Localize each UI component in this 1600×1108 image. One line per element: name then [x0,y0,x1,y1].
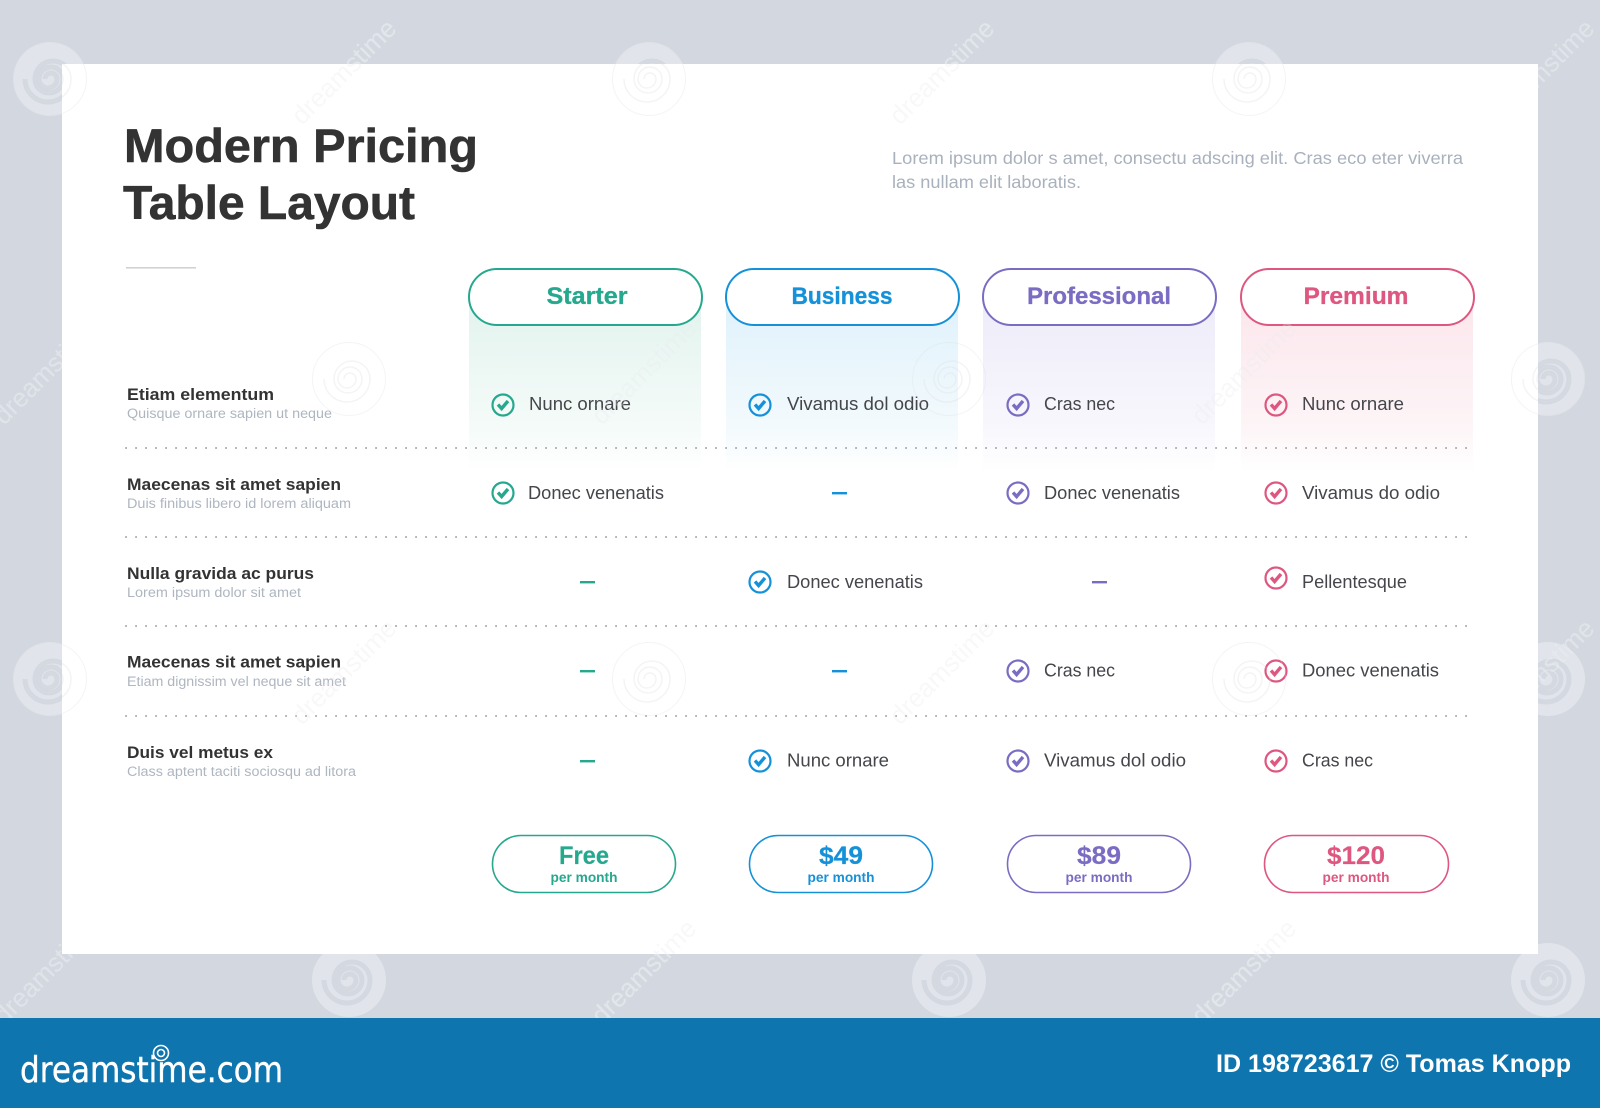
row 4 label: Maecenas sit amet sapien [127,652,341,672]
row 1 starter text: Nunc ornare [529,394,631,414]
white panel [62,64,1538,954]
price pill: $120: per month [1322,869,1390,885]
row 1 starter check [492,394,514,416]
title: Table Layout [123,176,415,229]
row 4 professional text: Cras nec [1044,660,1115,680]
description text [892,148,1463,192]
panel watermark text: dreamstime [285,613,402,730]
title: Modern Pricing [124,119,478,172]
header pill: Starter [469,269,702,325]
row 5 professional check [1008,750,1028,772]
row 1 business check [750,394,770,416]
row 4 [127,652,1439,689]
background watermark text: dreamstime [285,13,402,130]
row 5 label: Duis vel metus ex [127,743,274,762]
row 4 premium text: Donec venenatis [1302,660,1439,680]
panel watermark text: dreamstime [585,313,702,430]
row 2 business dash [832,492,847,494]
background watermark text: dreamstime [883,13,1000,130]
row 2 [127,475,1440,511]
row 3 business text: Donec venenatis [787,572,923,592]
column tint: premium [1241,296,1473,472]
price pill: $49: $49 [819,842,863,870]
panel watermark text: dreamstime [285,13,402,130]
price pill: $120 [1264,836,1448,892]
panel watermark text: dreamstime [1185,913,1302,1030]
background watermark text: dreamstime [1483,613,1600,730]
row 4 starter dash [580,670,595,672]
row 2 starter check [492,482,514,504]
header pill: Premium [1241,269,1474,325]
row 2 starter text: Donec venenatis [528,483,664,503]
header pill: Professional [983,269,1216,325]
row 3 starter dash [580,581,595,583]
row 3 premium check [1266,568,1286,588]
row 5 [127,743,1373,779]
footer credit: ID 198723617 © Tomas Knopp [1216,1050,1571,1078]
row 2 professional text: Donec venenatis [1044,483,1180,503]
price pill: $120: $120 [1327,842,1385,870]
panel watermark spirals [14,42,1584,716]
row 4 business dash [832,670,847,672]
header pill: Professional: Professional [1027,283,1171,310]
row 3 professional dash [1092,581,1107,583]
row 3 sublabel: Lorem ipsum dolor sit amet [127,585,301,600]
description text: Lorem ipsum dolor s amet, consectu adscing elit. Cras eco eter viverra [892,148,1463,168]
row dividers [126,448,1473,716]
row 5 premium text: Cras nec [1302,750,1373,770]
row 1 professional check [1008,394,1028,416]
row 3 premium text: Pellentesque [1302,572,1407,592]
row 2 professional check [1008,482,1028,504]
row 3 business check [750,572,770,592]
row 4 premium check [1266,660,1286,682]
panel watermark text: dreamstime [883,613,1000,730]
row 1 premium check [1266,394,1286,416]
header pill: Business [726,269,959,325]
row 2 label: Maecenas sit amet sapien [127,475,341,494]
row 3 [127,564,1407,600]
footer logo spiral [154,1046,168,1060]
row 5 sublabel: Class aptent taciti sociosqu ad litora [127,764,357,779]
price pill: $89: $89 [1077,842,1121,870]
row 5 professional text: Vivamus dol odio [1044,750,1186,770]
row 1 professional text: Cras nec [1044,394,1115,414]
row 5 starter dash [580,760,595,762]
background watermark text: dreamstime [585,913,702,1030]
row 2 premium check [1266,482,1286,504]
row 1 sublabel: Quisque ornare sapien ut neque [127,406,332,421]
price pill: Free: Free [559,842,609,870]
row 4 sublabel: Etiam dignissim vel neque sit amet [127,674,346,689]
row 5 business text: Nunc ornare [787,750,889,770]
row 2 premium text: Vivamus do odio [1302,483,1440,503]
row 3 label: Nulla gravida ac purus [127,564,314,583]
title divider [126,267,196,269]
price pill: Free [492,836,676,892]
background watermark text: dreamstime [1185,913,1302,1030]
title [123,119,478,229]
background watermark text: dreamstime [1483,13,1600,130]
column tint: starter [469,296,701,472]
price pill: Free: per month [550,869,618,885]
row 1 label: Etiam elementum [127,385,274,404]
description text: las nullam elit laboratis. [892,172,1081,192]
panel watermark text: dreamstime [883,13,1000,130]
header pill: Starter: Starter [546,283,628,310]
footer bar [0,1018,1600,1108]
header pill: Premium: Premium [1304,283,1408,310]
row 5 business check [750,750,770,772]
row 1 business text: Vivamus dol odio [787,394,929,414]
column tint: professional [983,296,1215,472]
row 1 premium text: Nunc ornare [1302,394,1404,414]
row 4 professional check [1008,660,1028,682]
panel watermark text: dreamstime [585,913,702,1030]
row 5 premium check [1266,750,1286,772]
column tint: business [726,296,958,472]
footer logo text: dreamstime.com [20,1050,283,1091]
price pill: $89 [1008,836,1190,892]
row 1 [127,385,1404,421]
price pill: $49 [750,836,932,892]
price pill: $49: per month [808,869,874,885]
panel watermark text [285,13,1302,1030]
header pill: Business: Business [792,283,892,310]
price pill: $89: per month [1066,869,1132,885]
row 2 sublabel: Duis finibus libero id lorem aliquam [127,496,351,511]
panel watermark text: dreamstime [1185,313,1302,430]
